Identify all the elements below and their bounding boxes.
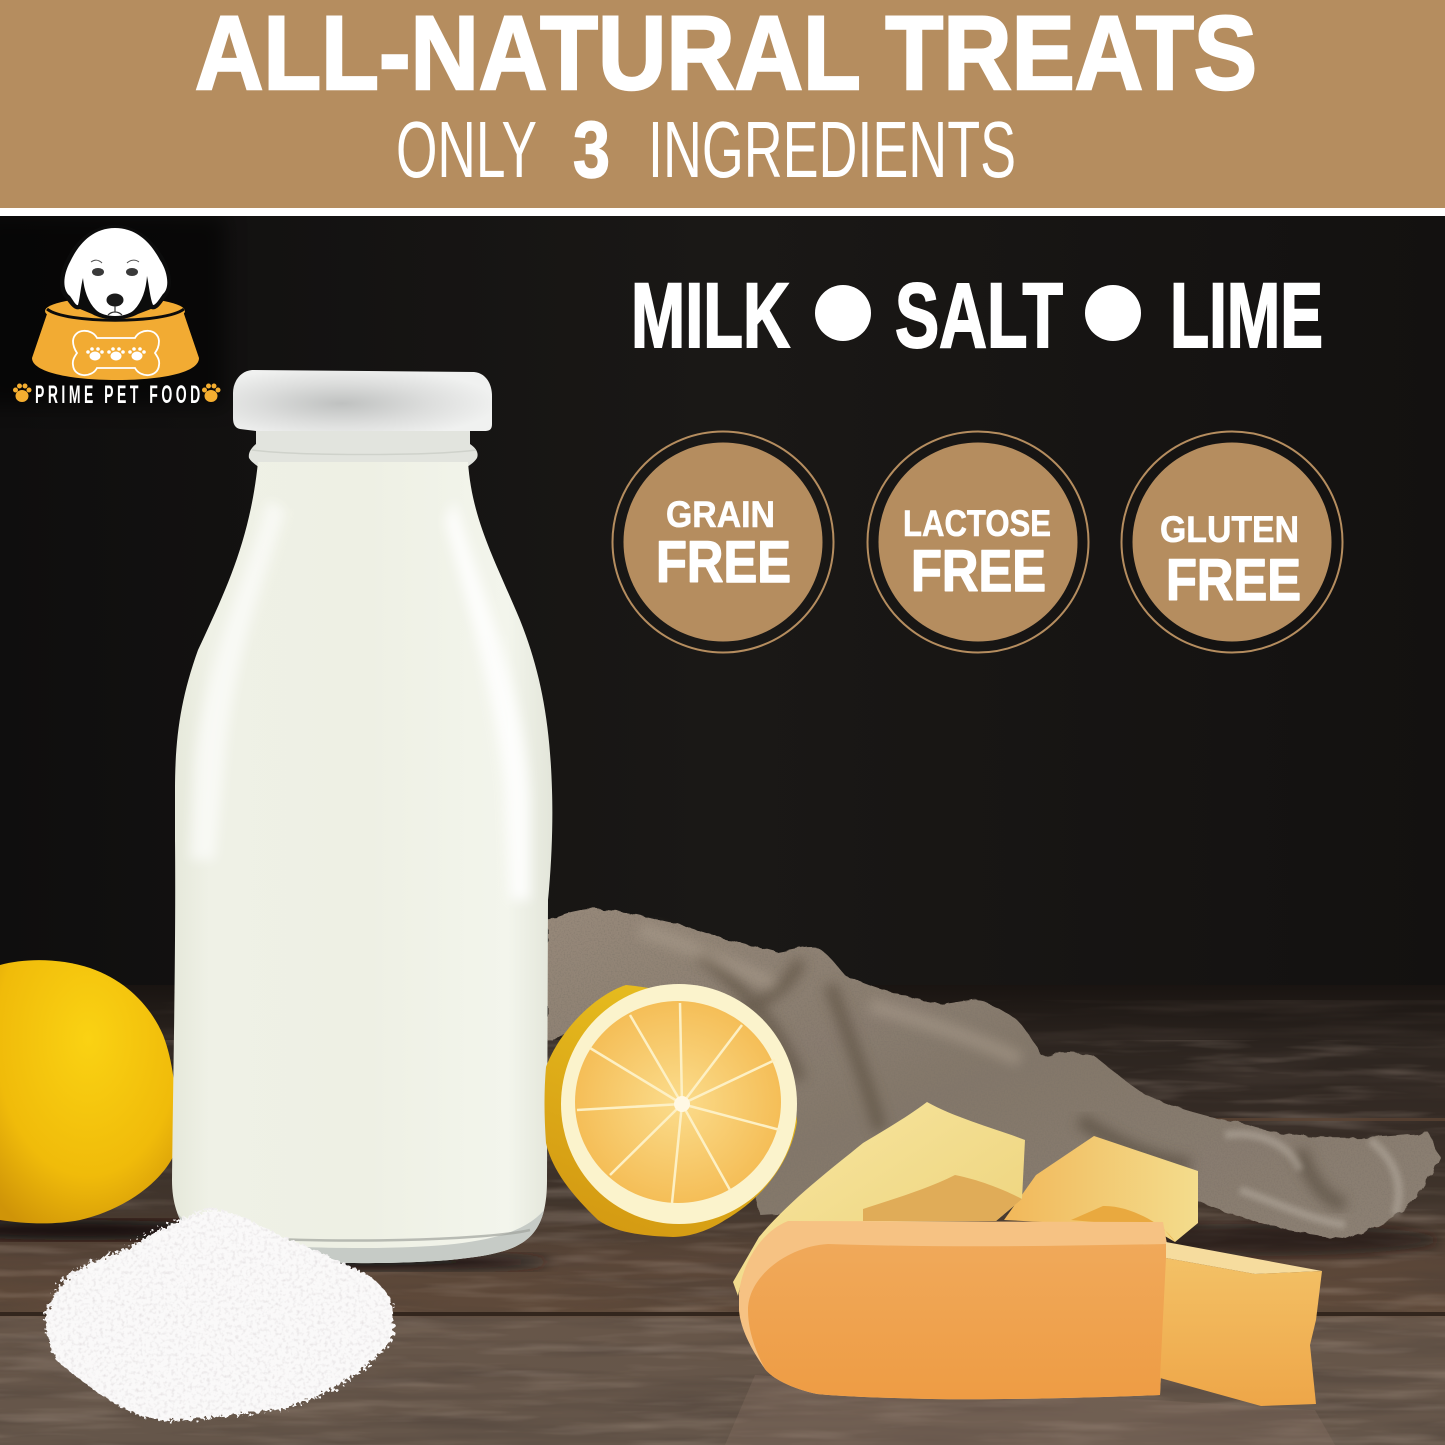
ingredients line: MILK bbox=[631, 265, 790, 367]
logo text: PRIME PET FOOD bbox=[35, 382, 200, 409]
milk body bbox=[160, 455, 570, 1275]
badge: lactose free: LACTOSE bbox=[903, 503, 1051, 544]
badge: grain free bbox=[612, 432, 834, 652]
background: wooden table bbox=[0, 985, 1445, 1445]
badge: gluten free: FREE bbox=[1166, 548, 1301, 613]
cheese reflection bbox=[725, 1375, 1335, 1445]
lemon flesh bbox=[575, 1001, 781, 1203]
halved lemon bbox=[544, 984, 797, 1237]
back wedge bbox=[1004, 1136, 1198, 1242]
logo: Prime Pet Food bbox=[0, 216, 225, 409]
ingredients line: SALT bbox=[895, 265, 1063, 367]
cheese bbox=[725, 1102, 1335, 1445]
bottle shadow bbox=[170, 1254, 550, 1270]
linen cloth bbox=[547, 909, 1440, 1239]
bottle cap bbox=[233, 370, 492, 431]
left whole lemon bbox=[0, 960, 177, 1223]
salt pile bbox=[45, 1209, 394, 1421]
badge: lactose free bbox=[868, 432, 1088, 652]
subtitle bbox=[396, 105, 1016, 194]
header band bbox=[0, 0, 1445, 216]
icon: paw right bbox=[202, 384, 220, 402]
main wedge bbox=[739, 1221, 1167, 1399]
glass neck bbox=[249, 430, 478, 468]
badge: lactose free: FREE bbox=[911, 539, 1046, 604]
milk bottle bbox=[160, 370, 570, 1275]
badge: gluten free bbox=[1122, 432, 1342, 652]
right wedge bbox=[1160, 1242, 1322, 1406]
badge: grain free: GRAIN bbox=[666, 494, 775, 535]
cloth folds bbox=[640, 930, 1399, 1225]
subtitle: INGREDIENTS bbox=[648, 105, 1016, 194]
logo backing bbox=[0, 224, 217, 398]
subtitle: ONLY bbox=[396, 105, 537, 194]
top wedge bbox=[733, 1102, 1025, 1296]
badge: grain free: FREE bbox=[656, 530, 791, 595]
subtitle: 3 bbox=[573, 105, 610, 194]
icon: paw left bbox=[13, 384, 32, 402]
lemon pith bbox=[561, 984, 797, 1224]
badge: gluten free: GLUTEN bbox=[1160, 509, 1299, 550]
icon: dog and bowl bbox=[32, 225, 199, 380]
background: dark wall bbox=[0, 216, 1445, 991]
ingredients line bbox=[631, 265, 1323, 367]
ingredients line: LIME bbox=[1170, 265, 1323, 367]
icon: bone with paws bbox=[73, 331, 159, 375]
